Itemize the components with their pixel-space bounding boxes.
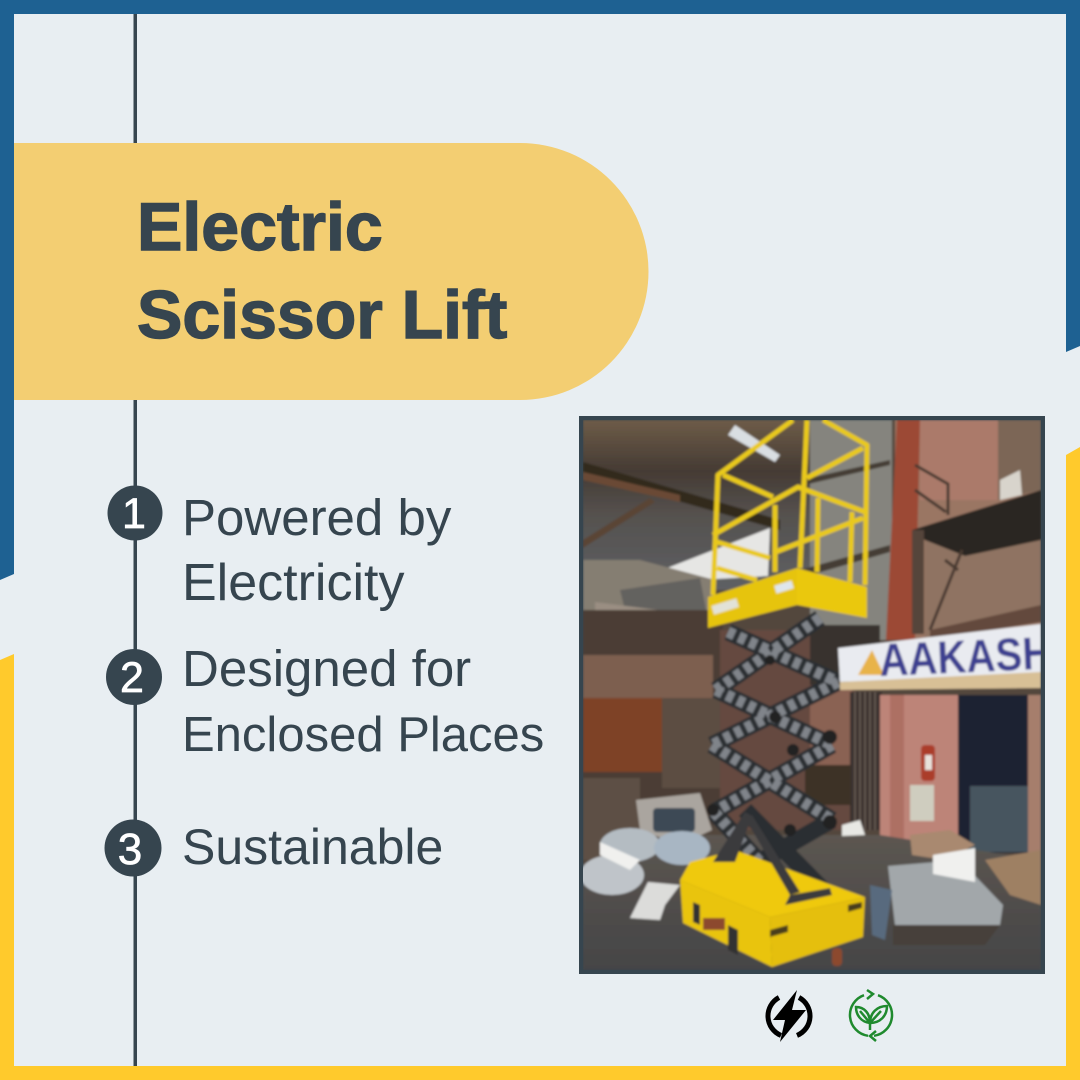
platform railings [713, 420, 867, 595]
photo: scissor lift in a workshop: AAKASH [878, 627, 1052, 686]
platform deck [708, 568, 797, 628]
list item 1: Powered by [182, 489, 452, 546]
yellow base [680, 850, 865, 917]
title text: Electric [137, 189, 383, 265]
list item 1 [108, 486, 452, 612]
list item 2: Enclosed Places [182, 708, 544, 762]
duct [583, 560, 715, 610]
list item 2: 2 [120, 654, 144, 702]
scissor arms [712, 618, 838, 895]
bags and boxes [583, 778, 640, 860]
roof and background [583, 420, 1041, 866]
frame: blue top and side borders [0, 0, 1080, 580]
list item 3: Sustainable [182, 819, 443, 875]
red column and upper wall [895, 420, 1041, 640]
list item 3: 3 [118, 825, 142, 874]
pink wall and door [880, 695, 958, 840]
title text: Scissor Lift [137, 277, 507, 353]
wrapped pallet [888, 860, 1003, 925]
list item 2 [106, 640, 544, 762]
fire extinguisher and meter [921, 745, 935, 781]
list item 1: 1 [122, 490, 146, 538]
gate [850, 692, 882, 830]
icon: sustainable leaf cycle [850, 990, 892, 1041]
title banner [14, 143, 648, 400]
lower left wall [583, 610, 723, 825]
icon: electric bolt [768, 990, 810, 1042]
photo: scissor lift in a workshop [579, 416, 1052, 974]
mezzanine [912, 490, 1041, 556]
list item 2: Designed for [182, 640, 471, 697]
timeline vertical line [134, 14, 137, 1066]
shop sign [838, 624, 1041, 682]
frame: yellow bottom and side borders [0, 447, 1080, 1080]
floor [583, 835, 1041, 970]
list item 1: Electricity [182, 554, 404, 612]
